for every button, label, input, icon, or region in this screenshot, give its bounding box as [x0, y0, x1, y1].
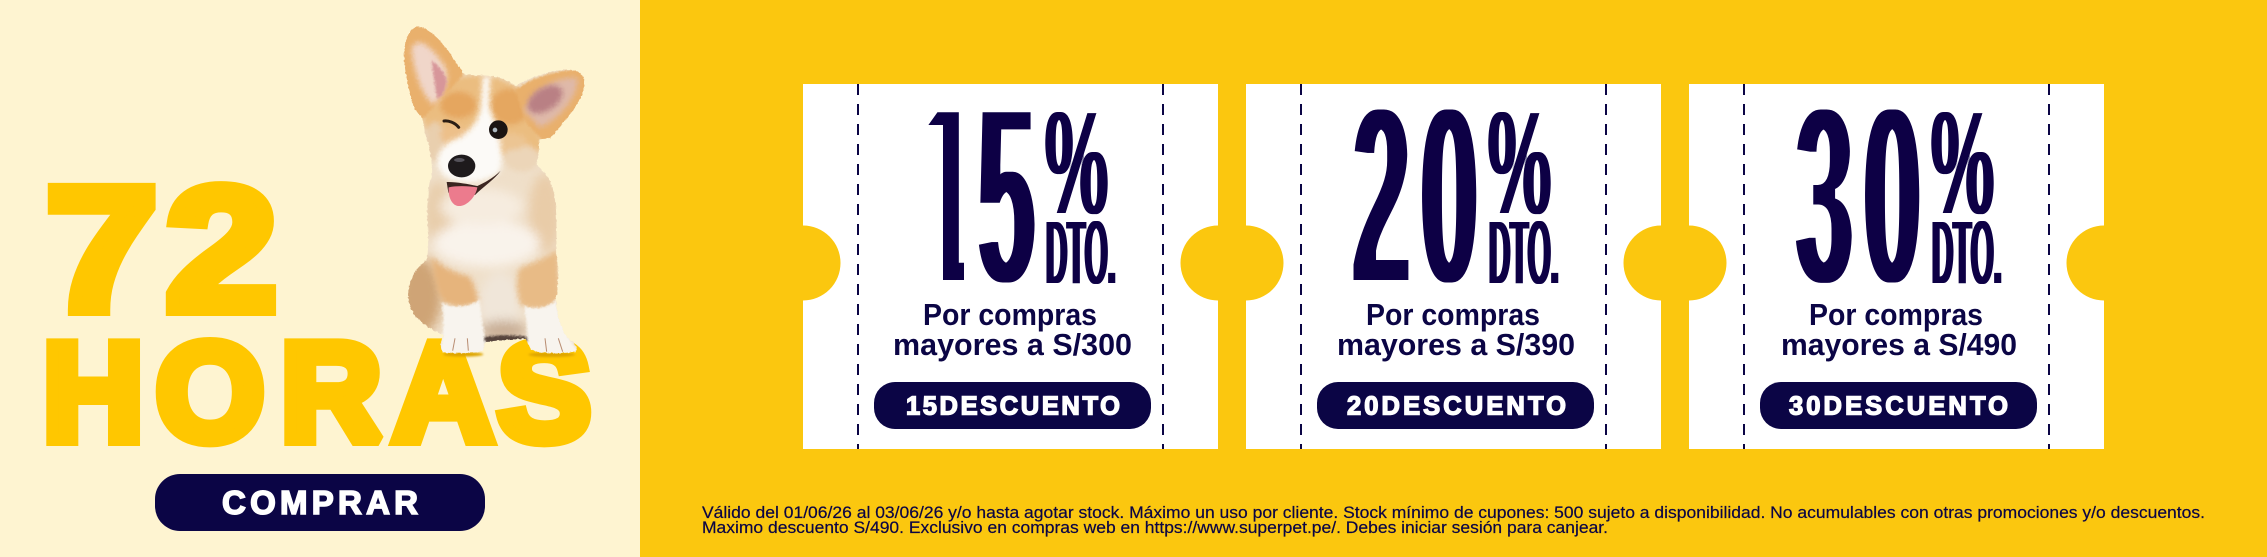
percent sign: % [1045, 78, 1108, 247]
percent sign: % [1488, 78, 1551, 247]
icon: corgi puppy [398, 23, 590, 357]
paw toes [453, 338, 563, 352]
title: 72: 72 [46, 151, 277, 347]
DTO label: DTO. [1489, 199, 1559, 305]
coupon: 20% [1246, 53, 1661, 449]
minimum purchase text: mayores a S/390 [1337, 327, 1575, 362]
ears [400, 23, 463, 120]
coupon: 15% [803, 53, 1218, 449]
head fur [422, 75, 543, 172]
foreleg orange patches [430, 249, 560, 309]
discount number: 0 [1864, 53, 1920, 340]
mouth and tongue [447, 171, 501, 195]
panel: left cream background [0, 0, 640, 557]
coupon ticket shape [1246, 84, 1661, 449]
minimum purchase text: mayores a S/490 [1781, 327, 2017, 362]
coupon code pill [874, 382, 1151, 429]
button: comprar: COMPRAR [222, 484, 418, 521]
panel: right yellow background [640, 0, 2267, 557]
DTO label: DTO. [1046, 199, 1116, 305]
minimum purchase text: Por compras [1366, 297, 1540, 332]
minimum purchase text: Por compras [923, 297, 1097, 332]
title: HORAS: HORAS [43, 315, 591, 470]
button: comprar [155, 474, 485, 531]
discount number: 5 [978, 53, 1034, 340]
discount number [928, 112, 1035, 282]
minimum purchase text: Por compras [1809, 297, 1983, 332]
legal text: Maximo descuento S/490. Exclusivo en compras web en https://www.superpet.pe/. Debes iniciar sesión para canjear. [702, 519, 1608, 537]
coupon ticket shape [803, 84, 1218, 449]
percent sign: % [1931, 78, 1994, 247]
coupon code pill: 20DESCUENTO [1347, 392, 1566, 420]
discount number: 2 [1353, 53, 1409, 340]
legal text [702, 504, 2205, 537]
minimum purchase text [1781, 297, 2017, 362]
coupon code pill [1760, 382, 2037, 429]
paw shadows on letters [443, 352, 575, 357]
body colouring [398, 173, 561, 339]
discount number: 3 [1796, 53, 1852, 340]
DTO label: DTO. [1932, 199, 2002, 305]
minimum purchase text: mayores a S/300 [893, 327, 1132, 362]
coupon code pill: 15DESCUENTO [906, 392, 1120, 420]
coupon code pill [1317, 382, 1594, 429]
discount number [1796, 53, 1920, 340]
nose [448, 155, 475, 177]
minimum purchase text [893, 297, 1132, 362]
coupon ticket shape [1689, 84, 2104, 449]
discount number: 1 [912, 53, 978, 340]
coupon: 30% [1689, 53, 2104, 449]
discount number [1353, 53, 1477, 340]
white socks [439, 299, 580, 354]
minimum purchase text [1337, 297, 1575, 362]
coupon code pill: 30DESCUENTO [1789, 392, 2008, 420]
eyes [444, 121, 459, 127]
legal text: Válido del 01/06/26 al 03/06/26 y/o hasta agotar stock. Máximo un uso por cliente. Stock mínimo de cupones: 500 sujeto a disponibilidad. No acumulables con otras promociones y/o descuentos. [702, 504, 2205, 522]
white muzzle and blaze [438, 76, 502, 182]
discount number: 0 [1421, 53, 1477, 340]
